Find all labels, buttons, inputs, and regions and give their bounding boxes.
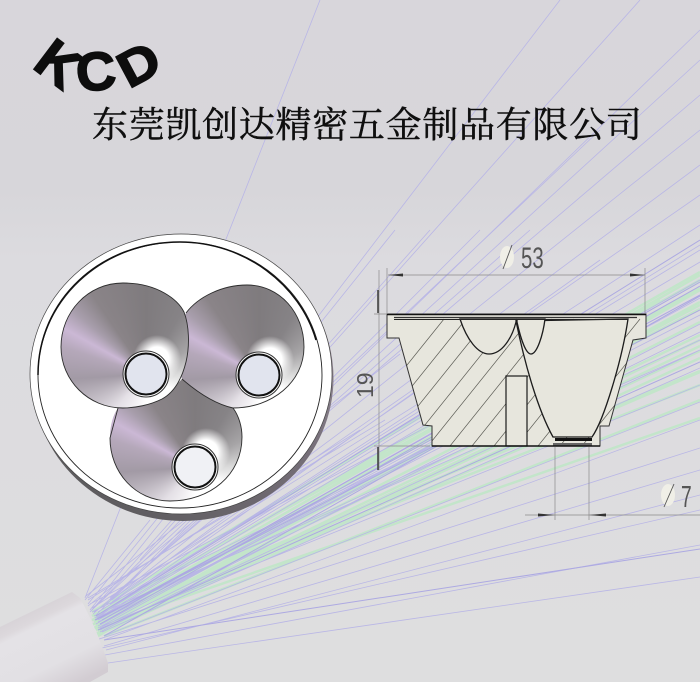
lens cross-section drawing — [357, 244, 700, 520]
dimension 7: 7 — [681, 481, 692, 514]
dimension 53 — [387, 242, 645, 314]
dimension 53: 53 — [521, 242, 544, 275]
left LED hole — [123, 351, 169, 397]
right reflector cup — [181, 286, 304, 408]
cup outlines and LED holes — [60, 282, 304, 502]
hatching — [406, 318, 640, 446]
company logo KCD: K — [24, 26, 94, 100]
company logo KCD: D — [108, 31, 170, 99]
lens disc body — [30, 234, 334, 521]
company logo KCD — [24, 26, 170, 100]
reflector cavity — [460, 319, 628, 437]
dimension 19 — [352, 270, 430, 470]
left reflector cup — [62, 284, 188, 408]
right LED hole — [236, 352, 282, 398]
section outline — [387, 314, 646, 446]
lens top view — [30, 234, 334, 521]
section body — [387, 314, 646, 446]
dimension 19: 19 — [352, 372, 378, 398]
mounting slot — [506, 376, 527, 446]
lower LED hole — [172, 444, 218, 490]
dimension 7 — [525, 447, 700, 520]
company name title: 东莞凯创达精密五金制品有限公司 — [92, 105, 643, 145]
lower reflector cup — [110, 379, 242, 500]
fibre cylinder — [0, 592, 108, 682]
LED seat — [553, 438, 592, 446]
